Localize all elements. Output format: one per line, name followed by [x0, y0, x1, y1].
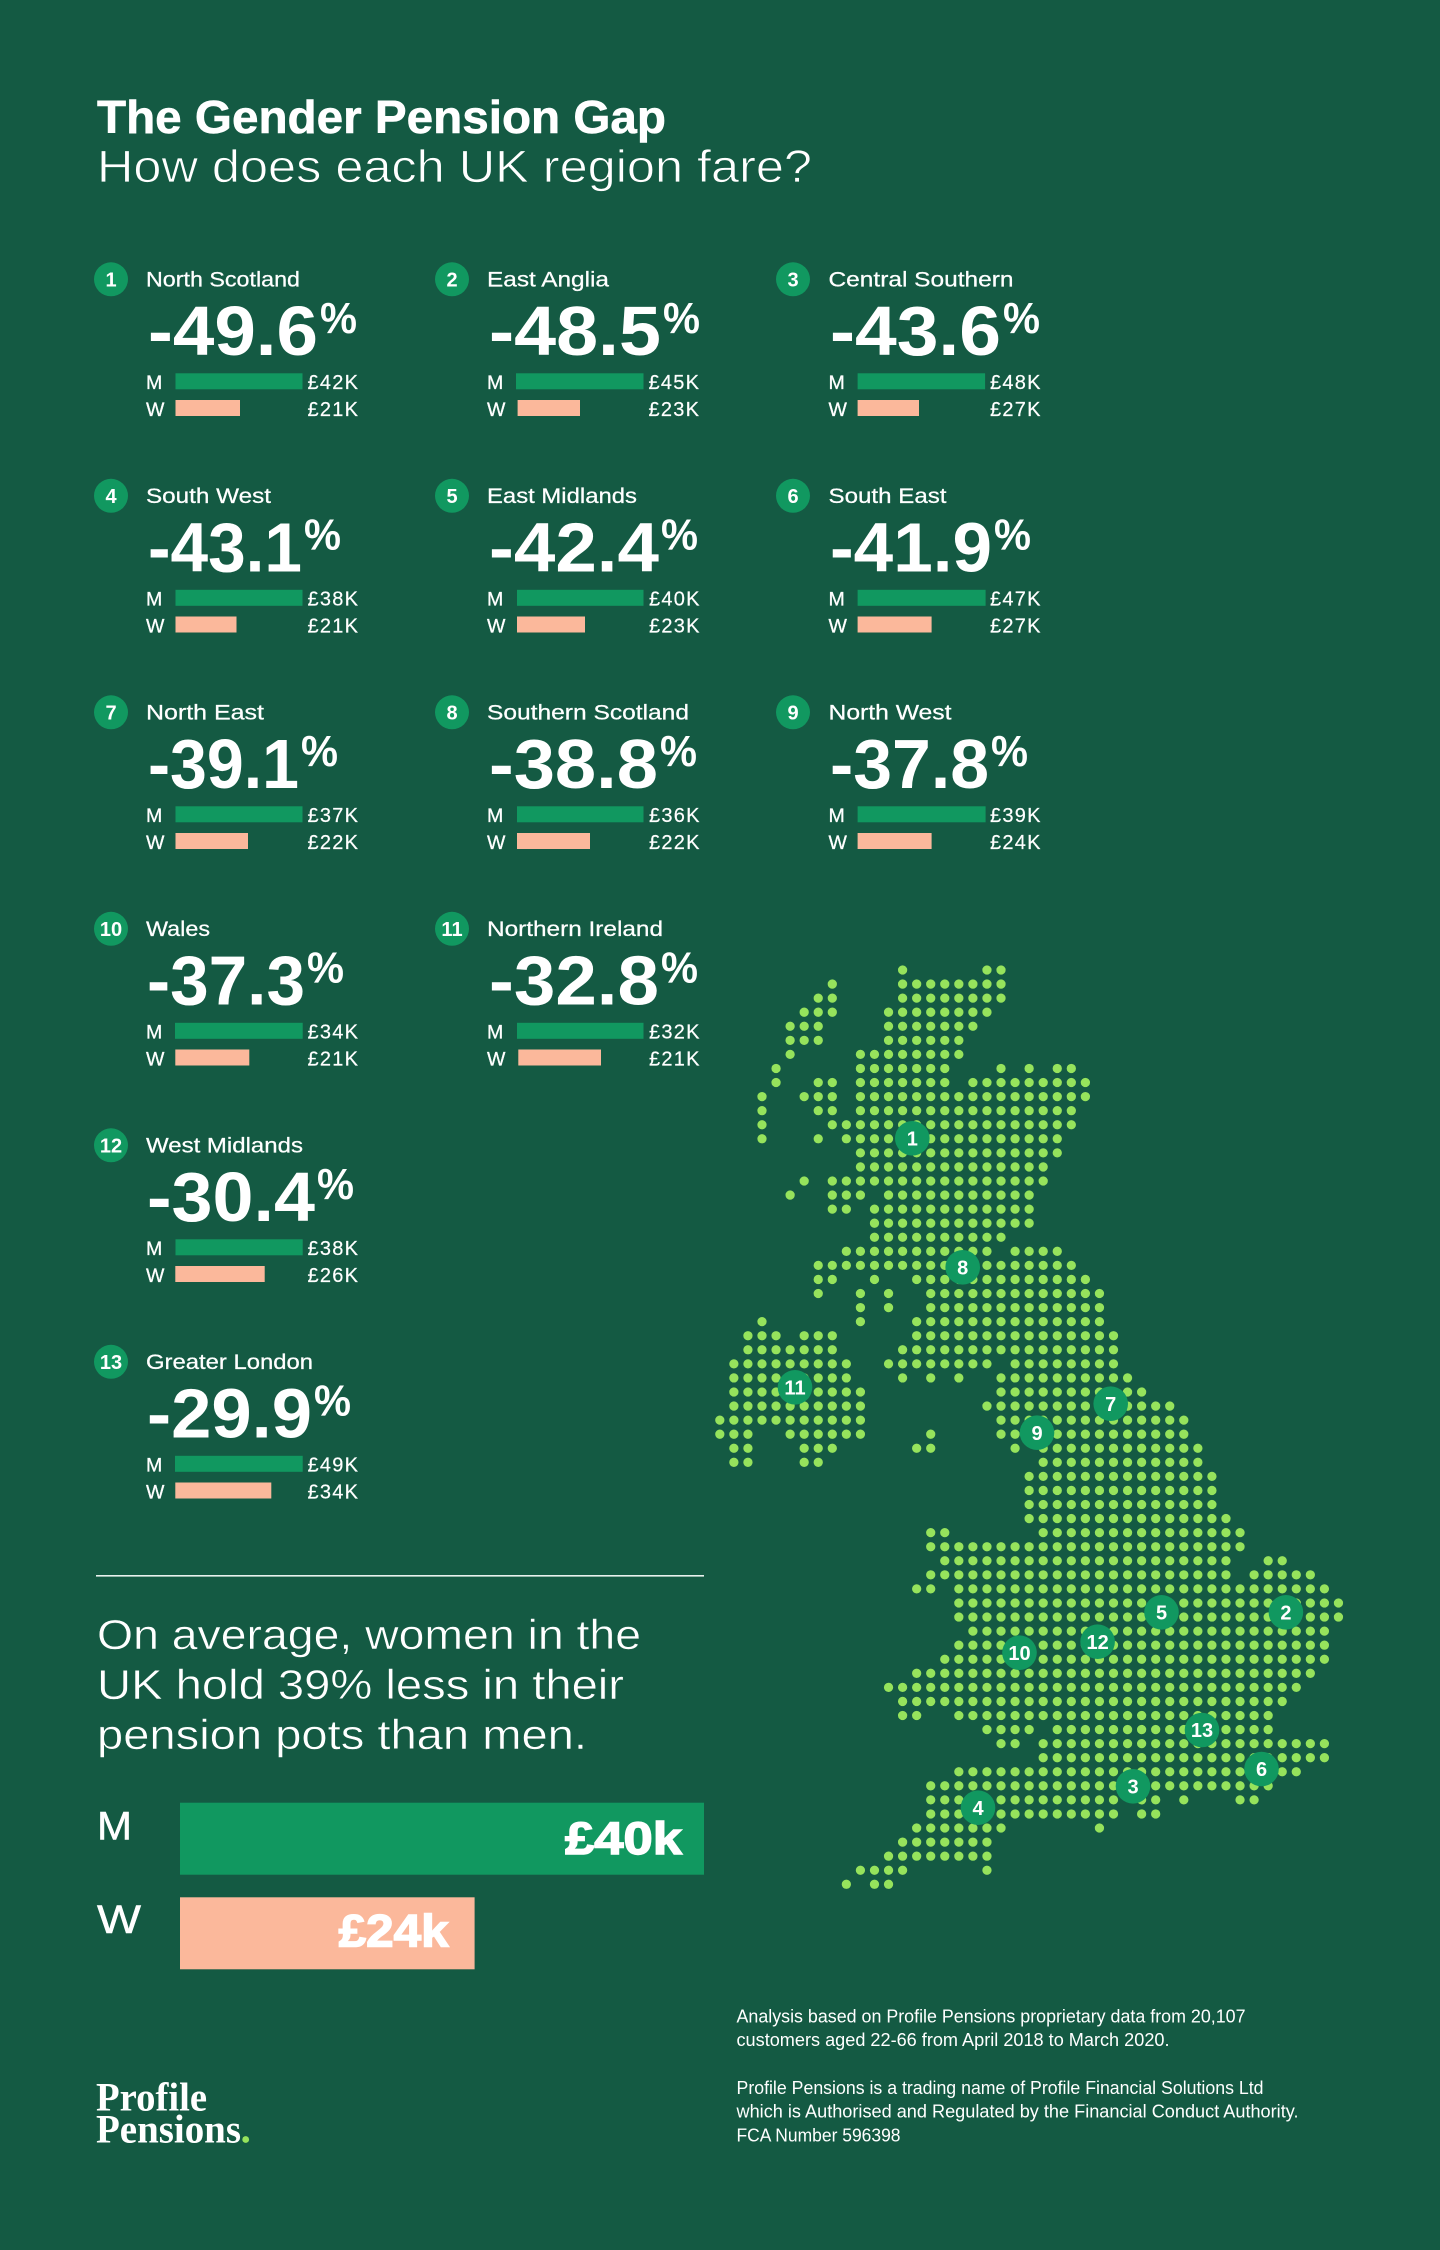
region name: East Anglia	[487, 269, 609, 292]
women bar: £21K	[308, 399, 359, 421]
map marker 6	[1244, 1752, 1279, 1786]
map marker 4: 4	[972, 1798, 984, 1820]
men bar: M	[146, 372, 162, 394]
average women bar	[97, 1897, 475, 1969]
men bar	[146, 805, 359, 827]
women bar: £22K	[649, 832, 701, 854]
men bar: £38K	[308, 1238, 359, 1260]
men bar: £49K	[308, 1454, 359, 1476]
badge 6: 6	[787, 486, 799, 508]
map marker 5	[1144, 1595, 1179, 1630]
men bar	[487, 805, 701, 827]
badge 8	[435, 695, 469, 729]
percentage gap: %	[1003, 294, 1040, 343]
footnote: analysis source: Analysis based on Profile Pensions proprietary data from 20,107	[736, 2007, 1246, 2027]
women bar: £21K	[649, 1048, 701, 1070]
badge 13: 13	[100, 1352, 122, 1374]
men bar	[828, 588, 1042, 610]
women bar	[487, 1048, 701, 1070]
map marker 13	[1185, 1713, 1219, 1747]
footnote: analysis source	[736, 2007, 1246, 2050]
women bar: W	[146, 399, 165, 421]
percentage gap: -29.9	[147, 1374, 312, 1452]
percentage gap: -43.6	[830, 292, 1001, 370]
map marker 10	[1002, 1635, 1037, 1670]
badge 5: 5	[446, 486, 458, 508]
badge 10	[94, 912, 128, 946]
card 7: North East	[94, 695, 359, 854]
card 1: North Scotland	[94, 262, 359, 421]
average men bar	[97, 1803, 704, 1875]
map marker 3: 3	[1127, 1776, 1139, 1798]
men bar: M	[146, 805, 162, 827]
badge 12: 12	[100, 1136, 122, 1158]
average women bar: £24k	[339, 1906, 450, 1957]
card 13: Greater London	[94, 1345, 359, 1504]
percentage gap: %	[994, 510, 1031, 560]
region name: West Midlands	[146, 1135, 303, 1158]
percentage gap: %	[320, 294, 357, 343]
percentage gap: %	[304, 510, 341, 560]
card 8: Southern Scotland	[435, 695, 701, 854]
footnote: legal text	[735, 2078, 1298, 2146]
region name: Southern Scotland	[487, 702, 689, 725]
men bar: M	[487, 805, 503, 827]
women bar	[487, 832, 701, 854]
men bar: M	[828, 805, 845, 827]
percentage gap: %	[314, 1376, 351, 1426]
women bar: W	[146, 1482, 165, 1504]
women bar: £23K	[648, 399, 700, 421]
summary statement: On average, women in the	[97, 1611, 641, 1658]
percentage gap: -49.6	[148, 292, 318, 370]
card 12: West Midlands	[94, 1128, 359, 1287]
badge 9	[776, 695, 810, 729]
badge 6	[776, 479, 810, 513]
map marker 2: 2	[1280, 1602, 1291, 1624]
men bar	[487, 1022, 701, 1044]
women bar: W	[146, 1265, 165, 1287]
badge 3	[776, 262, 810, 296]
men bar: £45K	[648, 372, 700, 394]
average women bar: W	[97, 1898, 141, 1942]
map marker 11	[778, 1370, 812, 1405]
percentage gap: %	[660, 727, 697, 776]
percentage gap: %	[991, 727, 1028, 776]
men bar	[828, 805, 1042, 827]
card 3: Central Southern	[776, 262, 1042, 421]
men bar: M	[487, 588, 503, 610]
card 5: East Midlands	[435, 479, 701, 638]
men bar: £39K	[990, 805, 1042, 827]
men bar: M	[146, 1454, 162, 1476]
percentage gap: -37.8	[830, 725, 989, 803]
percentage gap: -41.9	[830, 508, 992, 586]
men bar: M	[828, 588, 845, 610]
women bar	[146, 399, 359, 421]
men bar: M	[146, 1238, 162, 1260]
map marker 7: 7	[1105, 1394, 1116, 1416]
women bar	[146, 1265, 359, 1287]
logo: Profile Pensions: Pensions	[96, 2107, 241, 2152]
region name: South West	[146, 485, 271, 508]
percentage gap: -30.4	[147, 1158, 315, 1236]
badge 8: 8	[446, 702, 458, 724]
women bar: £22K	[308, 832, 359, 854]
men bar: £42K	[308, 372, 359, 394]
women bar: W	[828, 832, 848, 854]
map marker 12	[1080, 1624, 1115, 1659]
footnote: legal text: FCA Number 596398	[736, 2126, 900, 2146]
percentage gap: %	[307, 944, 344, 992]
average men bar: £40k	[565, 1813, 683, 1864]
men bar	[146, 1238, 359, 1260]
card 4: South West	[94, 479, 359, 638]
card 2: East Anglia	[435, 262, 700, 421]
map marker 8	[945, 1250, 980, 1285]
men bar: £32K	[649, 1022, 701, 1044]
map marker 2	[1269, 1595, 1303, 1630]
men bar	[146, 1022, 359, 1044]
women bar: W	[487, 1048, 506, 1070]
badge 1	[94, 262, 128, 296]
region name: North East	[146, 702, 264, 725]
percentage gap: -38.8	[489, 725, 658, 803]
card 10: Wales	[94, 912, 359, 1070]
women bar: £34K	[308, 1482, 359, 1504]
men bar: £37K	[308, 805, 359, 827]
percentage gap: -43.1	[148, 508, 302, 586]
men bar	[828, 372, 1042, 394]
summary statement: pension pots than men.	[97, 1711, 587, 1758]
men bar: £47K	[990, 588, 1042, 610]
badge 7	[94, 695, 128, 729]
subtitle: How does each UK region fare?	[97, 141, 812, 192]
women bar	[487, 399, 700, 421]
percentage gap: %	[663, 294, 700, 343]
badge 12	[94, 1128, 128, 1162]
region name: Greater London	[146, 1351, 313, 1374]
badge 10: 10	[100, 919, 122, 941]
map marker 4	[961, 1790, 995, 1825]
percentage gap: -48.5	[489, 292, 661, 370]
men bar: M	[487, 372, 503, 394]
badge 11: 11	[441, 919, 463, 941]
women bar: £24K	[990, 832, 1042, 854]
map marker 8: 8	[957, 1258, 968, 1280]
women bar	[146, 1482, 359, 1504]
women bar	[828, 616, 1042, 638]
women bar	[146, 1048, 359, 1070]
badge 5	[435, 479, 469, 513]
summary statement	[97, 1611, 641, 1758]
percentage gap: -39.1	[148, 725, 299, 803]
men bar: M	[828, 372, 845, 394]
map marker 7	[1093, 1386, 1128, 1421]
percentage gap: -42.4	[489, 508, 659, 586]
percentage gap: %	[661, 510, 698, 560]
badge 2: 2	[446, 270, 458, 292]
women bar: W	[487, 616, 506, 638]
title	[97, 91, 812, 192]
women bar: £21K	[308, 1048, 359, 1070]
badge 3: 3	[787, 270, 799, 292]
percentage gap: -32.8	[489, 942, 659, 1020]
map marker 11: 11	[784, 1378, 806, 1400]
map marker 9	[1020, 1415, 1054, 1450]
men bar	[146, 1454, 359, 1476]
men bar: M	[146, 588, 162, 610]
women bar	[146, 616, 359, 638]
map marker 10: 10	[1008, 1643, 1031, 1665]
women bar: W	[146, 1048, 165, 1070]
map marker 6: 6	[1256, 1759, 1267, 1781]
logo: Profile Pensions: Profile	[96, 2075, 207, 2120]
region name: Wales	[146, 918, 210, 941]
women bar	[487, 616, 701, 638]
footnote: legal text: Profile Pensions is a trading name of Profile Financial Solutions Ltd	[736, 2078, 1264, 2098]
women bar: £27K	[990, 399, 1042, 421]
women bar: W	[828, 399, 848, 421]
title: The Gender Pension Gap	[97, 91, 666, 143]
men bar: £38K	[308, 588, 359, 610]
badge 13	[94, 1345, 128, 1379]
women bar: £23K	[649, 616, 701, 638]
logo: Profile Pensions	[96, 2075, 249, 2152]
women bar: £27K	[990, 616, 1042, 638]
dot map of the UK	[720, 970, 1339, 1884]
percentage gap: -37.3	[147, 942, 305, 1020]
map marker 13: 13	[1191, 1720, 1213, 1742]
men bar: £48K	[990, 372, 1042, 394]
men bar: £40K	[649, 588, 701, 610]
region name: East Midlands	[487, 485, 637, 508]
map marker 5: 5	[1156, 1602, 1167, 1624]
card 6: South East	[776, 479, 1042, 638]
map marker 9: 9	[1031, 1423, 1043, 1445]
women bar: W	[828, 616, 848, 638]
women bar: W	[146, 832, 165, 854]
women bar	[828, 399, 1042, 421]
summary statement: UK hold 39% less in their	[97, 1661, 624, 1708]
average men bar: M	[97, 1804, 132, 1848]
region name: North Scotland	[146, 269, 300, 292]
women bar: W	[487, 832, 506, 854]
map marker 1: 1	[907, 1128, 918, 1150]
women bar: W	[146, 616, 165, 638]
card 9: North West	[776, 695, 1042, 854]
badge 7: 7	[105, 702, 117, 724]
women bar	[146, 832, 359, 854]
women bar: £26K	[308, 1265, 359, 1287]
men bar: £36K	[649, 805, 701, 827]
men bar: M	[146, 1022, 162, 1044]
map marker 3	[1116, 1769, 1150, 1804]
card 11: Northern Ireland	[435, 912, 701, 1070]
badge 9: 9	[787, 702, 799, 724]
badge 4: 4	[105, 486, 117, 508]
women bar	[828, 832, 1042, 854]
men bar	[487, 588, 701, 610]
men bar	[146, 588, 359, 610]
footnote: analysis source: customers aged 22-66 from April 2018 to March 2020.	[736, 2030, 1170, 2050]
map marker 1	[895, 1121, 930, 1156]
badge 1: 1	[105, 270, 117, 292]
men bar: £34K	[308, 1022, 359, 1044]
region name: North West	[828, 702, 952, 725]
region name: Central Southern	[828, 269, 1014, 292]
badge 4	[94, 479, 128, 513]
women bar: W	[487, 399, 506, 421]
badge 11	[435, 912, 469, 946]
men bar	[146, 372, 359, 394]
women bar: £21K	[308, 616, 359, 638]
footnote: legal text: which is Authorised and Regulated by the Financial Conduct Authority.	[735, 2102, 1298, 2122]
percentage gap: %	[661, 944, 698, 992]
men bar: M	[487, 1022, 503, 1044]
percentage gap: %	[301, 727, 338, 776]
men bar	[487, 372, 700, 394]
map marker 12: 12	[1086, 1632, 1109, 1654]
region name: South East	[828, 485, 947, 508]
badge 2	[435, 262, 469, 296]
region name: Northern Ireland	[487, 918, 663, 941]
percentage gap: %	[317, 1160, 354, 1209]
